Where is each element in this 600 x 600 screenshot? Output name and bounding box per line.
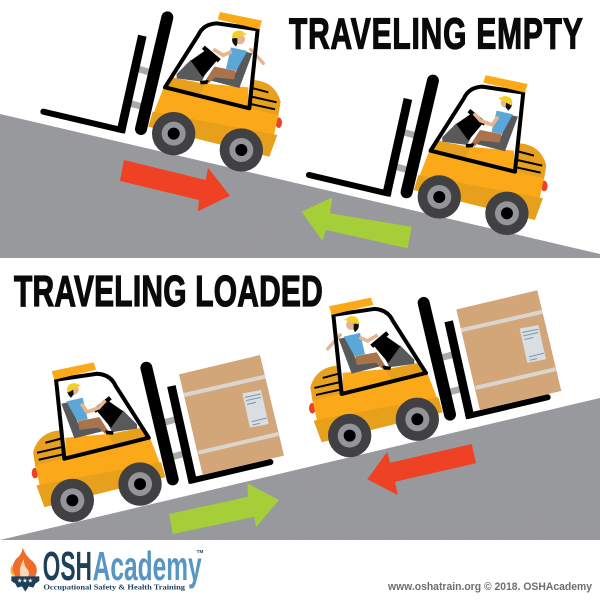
footer: website and copyright: www.oshatrain.org © 2018. OSHAcademy [387,581,593,593]
wheels [152,112,263,172]
seat [61,402,103,438]
console and steering [442,111,485,145]
cab frame [333,309,426,394]
roof [52,362,96,380]
forklift: loaded reversing downhill [309,298,548,457]
arrow: red downhill warning [367,444,476,495]
seat [476,115,518,151]
trademark: TM [197,549,204,554]
driver [328,316,391,370]
title: traveling empty: TRAVELING EMPTY [289,9,583,58]
driver [66,383,114,435]
wheels [418,175,529,235]
cab frame [431,87,523,172]
tagline: Occupational Safety & Health Training [43,582,185,591]
forklift: empty reversing uphill [309,75,548,235]
roof [329,298,373,315]
icon: flame and gear [10,548,39,592]
forklift: empty going downhill [43,12,282,172]
wordmark: OSH: OSH [43,543,92,589]
vents [516,152,542,173]
title: traveling loaded: TRAVELING LOADED [14,266,323,315]
load: crate on uphill forklift [179,355,284,475]
vents [314,374,340,395]
mast and forks [146,368,270,483]
cab frame [165,23,258,108]
logo: OSHAcademy [10,543,204,592]
body [309,363,443,442]
console and steering [372,333,414,367]
mast and forks [424,303,548,418]
icon: flame and gear: ★★★ [17,578,33,585]
arrow: green safe direction [169,483,279,534]
mast and forks [43,17,167,133]
seat [339,337,380,374]
vents [37,439,63,460]
load: crate on downhill forklift [456,290,561,410]
driver [466,96,513,148]
console and steering [177,47,219,82]
wheels [51,462,162,522]
lower ramp [0,398,600,540]
arrow: green safe direction [302,197,412,248]
body [148,77,282,157]
upper ramp [0,114,600,258]
seat [211,52,252,88]
forklift: loaded going uphill [32,362,270,522]
roof [483,75,528,93]
arrow: red downhill warning [120,160,230,211]
body [414,141,548,220]
console and steering [94,398,137,432]
cab frame [56,374,149,459]
wordmark: Academy: Academy [93,543,202,589]
roof [218,12,262,29]
mast and forks [309,81,433,196]
driver [200,30,263,84]
body [32,428,165,507]
wheels [328,398,439,457]
vents [251,88,277,109]
